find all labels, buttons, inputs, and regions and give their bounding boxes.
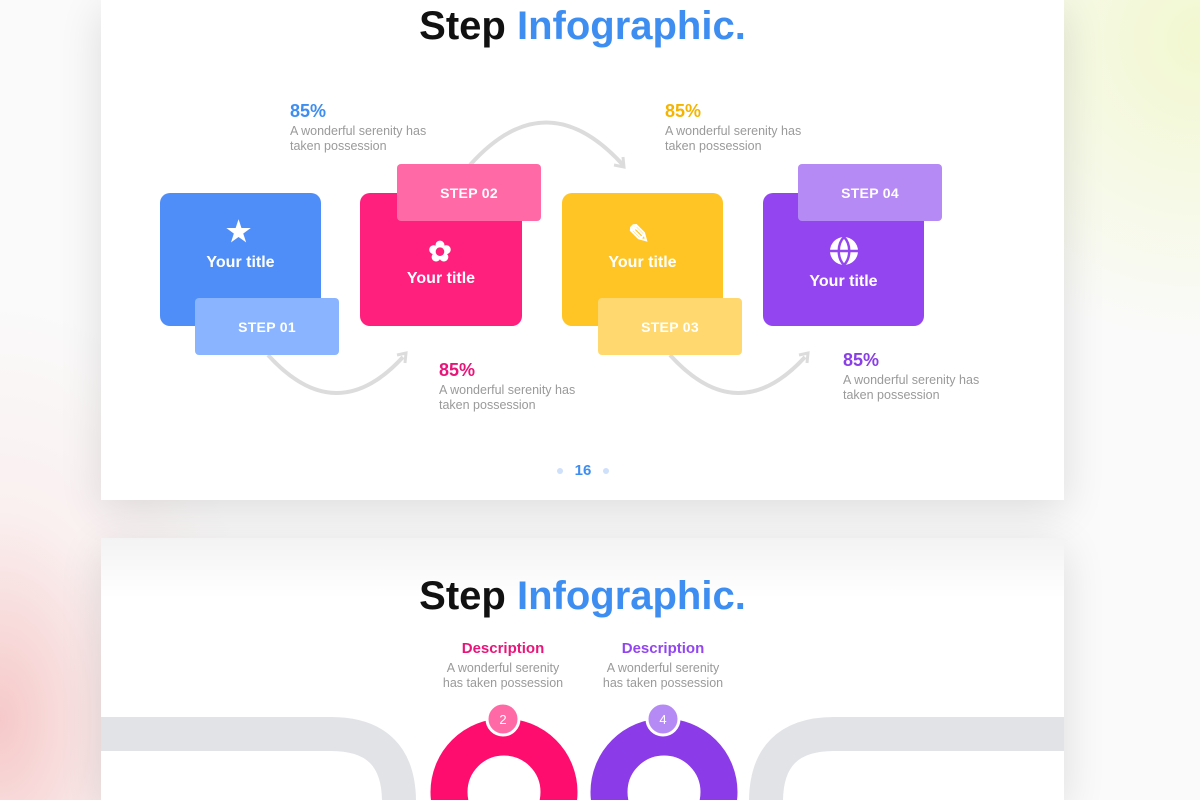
text block 1: A wonderful serenity has taken possession: [290, 124, 426, 153]
card 4: Your title: [809, 273, 878, 290]
step 03 label: STEP 03: [641, 318, 699, 334]
text block 2: A wonderful serenity has taken possession: [439, 383, 575, 412]
page number: [557, 462, 609, 479]
description 4: A wonderful serenity: [607, 661, 719, 675]
text block 3: A wonderful serenity has taken possession: [665, 124, 801, 153]
card 3: [562, 193, 723, 326]
card 4: [763, 193, 924, 326]
text block 2: [439, 360, 575, 412]
step 04 label: STEP 04: [841, 184, 899, 200]
text block 3: 85%: [665, 101, 701, 121]
title: Step Infographic.: [419, 4, 746, 48]
description 4: has taken possession: [603, 676, 723, 690]
icon: flower: ✿: [428, 236, 452, 267]
text block 2: 85%: [439, 360, 475, 380]
text block 3: [665, 101, 801, 153]
slide: bottom step infographic: [101, 538, 1064, 800]
description 2: A wonderful serenity: [447, 661, 559, 675]
step 02 label: STEP 02: [440, 184, 498, 200]
card 1: [160, 193, 321, 326]
text block 4: A wonderful serenity has taken possession: [843, 373, 979, 402]
text block 1: 85%: [290, 101, 326, 121]
path bands and donuts: 4: [659, 712, 667, 727]
text block 1: [290, 101, 426, 153]
page number: 16: [575, 462, 591, 479]
step 01 label: [195, 298, 339, 355]
step 03 label: [598, 298, 742, 355]
icon: globe: [830, 237, 858, 265]
icon: pencil: ✎: [628, 219, 650, 249]
icon: star wand: ★: [226, 216, 251, 247]
slide: top step infographic: [101, 0, 1064, 500]
step 02 label: [397, 164, 541, 221]
card 1: Your title: [206, 254, 275, 271]
step 04 label: [798, 164, 942, 221]
card 2: Your title: [407, 270, 475, 287]
description 4: [603, 640, 723, 690]
path bands and donuts: [101, 704, 1064, 800]
description 2: [443, 640, 563, 690]
arrows: connecting arcs: [266, 120, 810, 395]
description 2: Description: [462, 640, 544, 657]
description 2: has taken possession: [443, 676, 563, 690]
title: Step Infographic.: [419, 574, 746, 618]
card 2: [360, 193, 522, 326]
step 01 label: STEP 01: [238, 318, 296, 334]
text block 4: [843, 350, 979, 402]
card 3: Your title: [608, 254, 677, 271]
path bands and donuts: 2: [499, 712, 507, 727]
description 4: Description: [622, 640, 704, 657]
text block 4: 85%: [843, 350, 879, 370]
